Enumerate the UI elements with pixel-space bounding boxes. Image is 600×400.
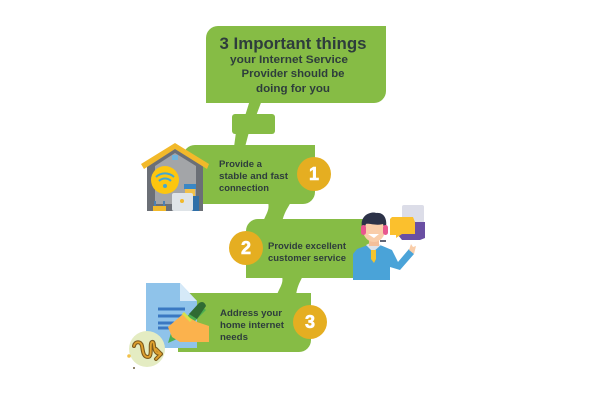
title panel (206, 26, 386, 103)
step 3 text: home internet (220, 320, 285, 331)
panel: step 3 (178, 293, 327, 352)
step 2 number badge: 2 (241, 238, 251, 258)
connector: step 2 to step 3 (277, 276, 303, 295)
step 3 text: needs (220, 332, 248, 343)
step 1 text (219, 159, 289, 194)
title subheading: your Internet Service (230, 54, 348, 66)
step 3 number badge (293, 305, 327, 339)
panel: step 1 (183, 145, 331, 204)
step 2 text: Provide excellent (268, 241, 347, 252)
step 2 text: customer service (268, 253, 346, 264)
title subheading (230, 54, 348, 95)
icon: document with hand and pen (146, 283, 209, 348)
step 1 text: Provide a (219, 159, 263, 170)
icon: smart home with wifi (141, 143, 209, 211)
icon: winding road arrow badge (127, 331, 165, 369)
step 1 number badge: 1 (309, 164, 319, 184)
step 3 text: Address your (220, 308, 282, 319)
step 1 number badge (297, 157, 331, 191)
step 2 text (268, 241, 347, 264)
connector: step 1 to step 2 (263, 202, 291, 222)
step 1 text: stable and fast (219, 171, 289, 182)
connector: title to small box (234, 100, 262, 147)
title subheading: Provider should be (242, 68, 344, 80)
step 3 number badge: 3 (305, 312, 315, 332)
title subheading: doing for you (256, 83, 330, 95)
step 1 text: connection (219, 183, 269, 194)
step 2 number badge (229, 231, 263, 265)
small connector box (232, 114, 275, 134)
title heading: 3 Important things (220, 34, 366, 53)
panel: step 2 (229, 219, 370, 278)
step 3 text (220, 308, 285, 343)
icon: customer service agent with speech bubbles (353, 205, 425, 280)
